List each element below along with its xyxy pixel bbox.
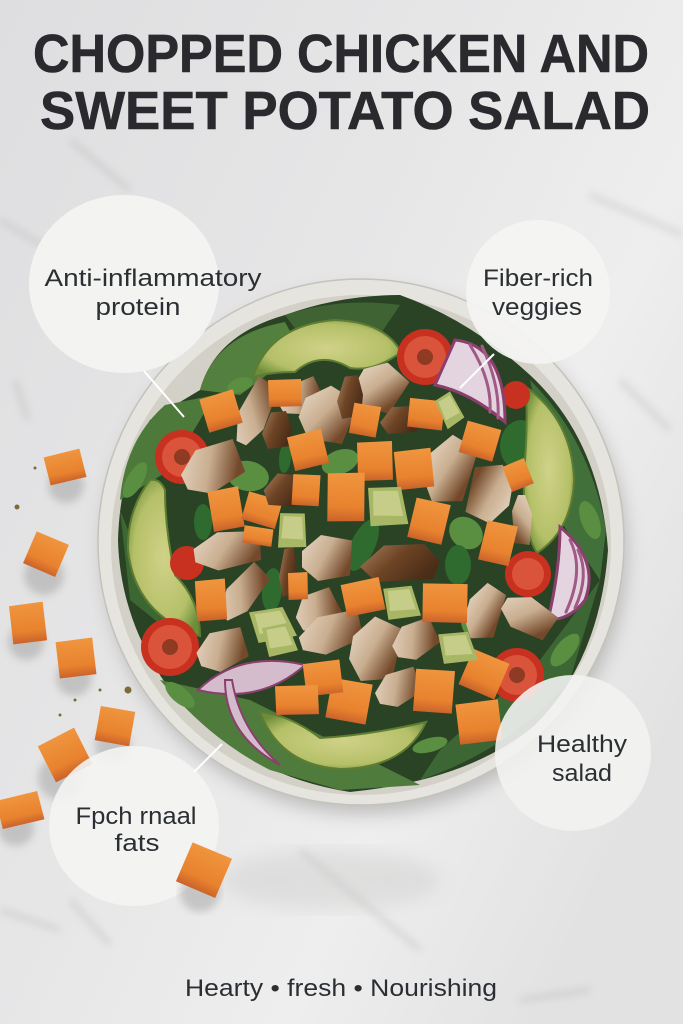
loose sweet potato cubes on marble bbox=[0, 448, 136, 846]
avocado halves bbox=[128, 320, 574, 769]
callout: anti-inflammatory protein: Anti-inflammatory bbox=[44, 265, 262, 292]
callout: fiber-rich veggies bbox=[460, 220, 610, 388]
red onions bbox=[198, 340, 589, 765]
callout: fiber-rich veggies: veggies bbox=[492, 294, 582, 321]
bowl bbox=[98, 279, 627, 814]
title bbox=[33, 24, 650, 141]
title: SWEET POTATO SALAD bbox=[40, 81, 650, 141]
callout: healthy salad bbox=[495, 675, 651, 831]
callout: anti-inflammatory protein: protein bbox=[96, 294, 180, 321]
sweet potato cubes in bowl bbox=[195, 379, 534, 745]
salad greens bbox=[118, 295, 608, 792]
avocado cubes in bowl bbox=[249, 390, 480, 667]
callout: fats: fats bbox=[114, 830, 160, 857]
loose sweet potato cube over callout bbox=[175, 841, 233, 912]
callout: anti-inflammatory protein bbox=[29, 195, 262, 417]
callout: healthy salad: Healthy bbox=[537, 731, 627, 758]
chicken pieces bbox=[174, 354, 560, 713]
tomatoes bbox=[141, 329, 551, 702]
callout: fats bbox=[49, 744, 222, 906]
title: CHOPPED CHICKEN AND bbox=[33, 24, 649, 84]
callout: healthy salad: salad bbox=[552, 760, 612, 787]
callout: fats: Fpch rnaal bbox=[76, 803, 196, 830]
footer tagline: Hearty • fresh • Nourishing bbox=[185, 975, 497, 1002]
callout: fiber-rich veggies: Fiber-rich bbox=[483, 265, 593, 292]
